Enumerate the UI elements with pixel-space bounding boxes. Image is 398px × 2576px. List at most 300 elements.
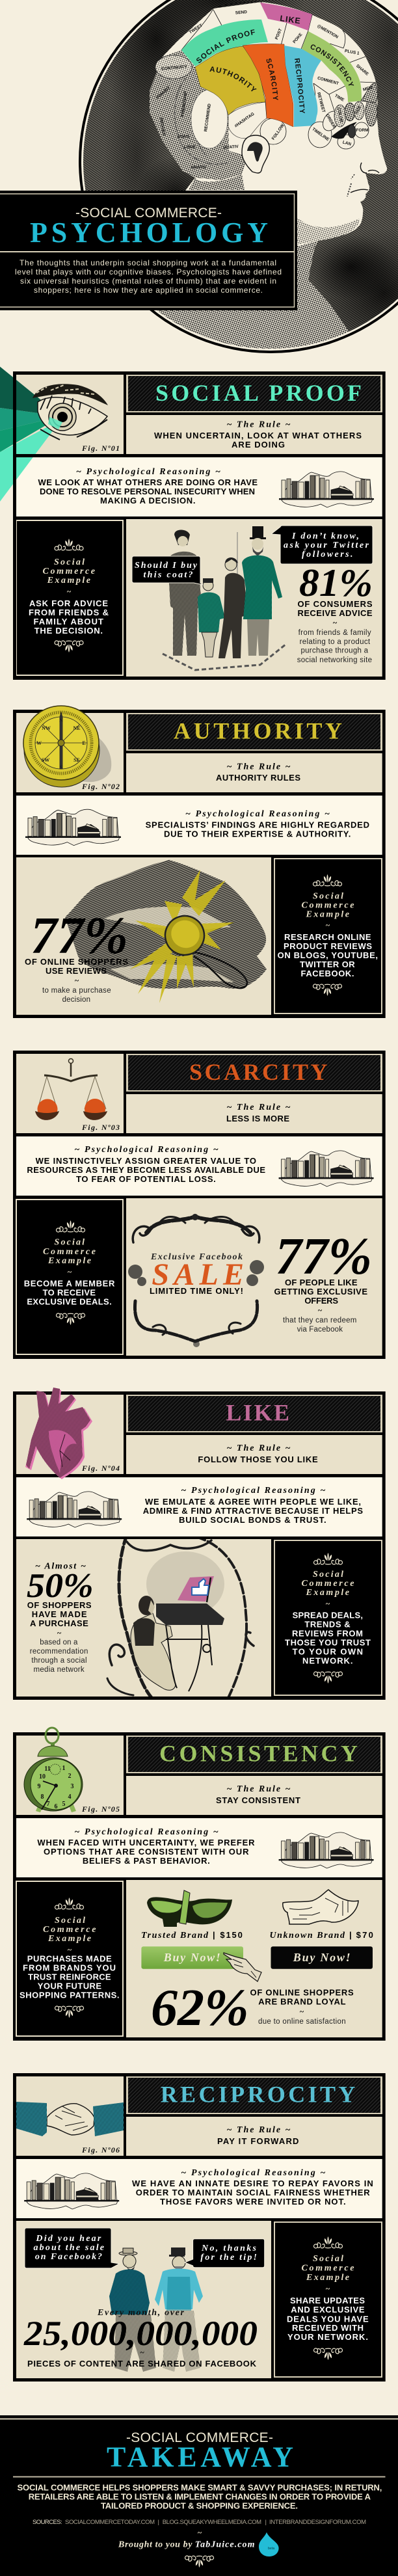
man in blue coat: [109, 2248, 156, 2372]
head organ labels: TIME: [334, 94, 345, 103]
sources: INTERBRANDDESIGNFORUM.COM: [269, 2519, 366, 2526]
stat: 50%: ~ Almost ~: [35, 1562, 86, 1572]
example panel: REVIEWS FROM: [292, 1629, 363, 1639]
stat: 62%: OF ONLINE SHOPPERS: [250, 1988, 354, 1998]
stat: 77%: 77%: [31, 907, 128, 965]
icon: alarm clock: 10: [39, 1773, 46, 1780]
intro text: The thoughts that underpin social shopping work at a fundamental: [20, 258, 276, 267]
speech bubble: no thanks: for the tip!: [200, 2253, 257, 2262]
icon: tabjuice drop logo: beta: [268, 2547, 274, 2551]
psychological reasoning: [37, 1827, 255, 1866]
psychological reasoning: [38, 467, 258, 505]
brought to you by: TabJuice.com: [195, 2540, 255, 2550]
head organ labels: LAN: [342, 140, 352, 147]
stat: 77%: USE REVIEWS: [46, 966, 107, 976]
rule: ~ The Rule ~: [226, 1103, 291, 1112]
illustration: ornate sale frame: [128, 1214, 264, 1347]
sources: SOCIALCOMMERCETODAY.COM: [65, 2519, 155, 2526]
stat: 81%: relating to a product: [300, 638, 371, 646]
example panel: TO RECEIVE: [43, 1288, 96, 1298]
stat: 81%: RECEIVE ADVICE: [298, 608, 373, 618]
example panel: Social: [55, 1237, 85, 1248]
rule: [216, 1784, 300, 1805]
head organ labels: FORM: [356, 128, 369, 133]
frame: [13, 371, 386, 680]
psychological reasoning: DONE TO RESOLVE PERSONAL INSECURITY WHEN: [40, 487, 255, 496]
stat: 77%: ~: [318, 1306, 323, 1315]
colored label: authority: [195, 46, 265, 115]
stat: 25 billion pieces: ~: [140, 2348, 144, 2357]
icon: alarm clock: 5: [62, 1801, 65, 1808]
example panel: FACEBOOK.: [300, 969, 354, 978]
stat: 50%: based on a: [40, 1639, 78, 1646]
example panel: ~: [68, 1945, 72, 1954]
icon: alarm clock: 3: [70, 1783, 74, 1790]
section 4: like: [13, 1388, 386, 1700]
head organ labels: @MENTION: [316, 24, 339, 40]
icon: anatomical heart: [25, 1388, 92, 1479]
hero illustration: phrenology head: [79, 0, 398, 353]
stat: 81%: from friends & family: [298, 629, 371, 637]
speech bubble: no thanks: [185, 2239, 265, 2268]
psychological reasoning: RESOURCES AS THEY BECOME LESS AVAILABLE DUE: [27, 1165, 265, 1175]
psychological reasoning: OPTIONS THAT ARE CONSISTENT WITH OUR: [44, 1847, 249, 1857]
takeaway text: [17, 2482, 382, 2510]
speech bubble: should I buy: this coat?: [143, 570, 192, 580]
psychological reasoning: WE LOOK AT WHAT OTHERS ARE DOING OR HAVE: [38, 477, 258, 487]
psychological reasoning: BELIEFS & PAST BEHAVIOR.: [83, 1856, 210, 1866]
figure caption: Fig. Nº02: [81, 782, 120, 791]
psychological reasoning: THOSE FAVORS WERE INVITED OR NOT.: [160, 2197, 346, 2207]
button: Buy Now!: [293, 1951, 351, 1964]
section title: SCARCITY: [189, 1059, 328, 1085]
rule: LESS IS MORE: [226, 1114, 289, 1123]
psychological reasoning: WE INSTINCTIVELY ASSIGN GREATER VALUE TO: [36, 1156, 256, 1166]
example panel: FAMILY ABOUT: [34, 617, 103, 626]
stat: 81%: ~: [333, 618, 338, 627]
head organ labels: SIZE: [354, 105, 363, 115]
stat: 81%: social networking site: [297, 656, 372, 664]
head organ labels: TWEET: [189, 23, 204, 35]
colored label: scarcity: SCARCITY: [267, 59, 278, 100]
frame: [13, 1051, 386, 1359]
sale text: LIMITED TIME ONLY!: [150, 1286, 243, 1296]
example panel: TRENDS &: [304, 1620, 351, 1630]
icon: pointing hand: [224, 1953, 261, 1981]
icon: white clog: [283, 1890, 358, 1924]
example panel: Commerce: [302, 2264, 354, 2274]
icon: compass: W: [36, 740, 42, 746]
psychological reasoning: SPECIALISTS’ FINDINGS ARE HIGHLY REGARDED: [146, 820, 369, 830]
stat: 25 billion pieces: Every month, over: [97, 2308, 185, 2318]
stat: 25 billion pieces: 25,000,000,000: [23, 2314, 258, 2353]
icon: alarm clock: 6: [55, 1803, 57, 1810]
jaw shading: [297, 218, 359, 245]
icon: alarm clock: 7: [47, 1801, 49, 1808]
head organ labels: PROGEN: [159, 117, 166, 137]
rule: [154, 420, 362, 449]
icon: bookshelf: [25, 809, 121, 846]
stat: 77%: OF PEOPLE LIKE: [285, 1278, 358, 1287]
psychological reasoning: ~ Psychological Reasoning ~: [181, 1486, 325, 1496]
psychological reasoning: TO FEAR OF POTENTIAL LOSS.: [76, 1174, 216, 1184]
example panel: Commerce: [302, 900, 354, 911]
example panel: SPREAD DEALS,: [293, 1611, 363, 1620]
stat: 50%: [27, 1562, 94, 1674]
example panel: PRODUCT REVIEWS: [284, 941, 372, 951]
stat: 81%: purchase through a: [300, 647, 369, 655]
colored label: reciprocity: RECIPROCITY: [295, 59, 305, 113]
example panel: [278, 874, 378, 996]
colored label: consistency: [302, 31, 362, 102]
speech bubble: ask your followers: followers.: [302, 550, 352, 559]
head organ labels: SONS: [178, 135, 190, 139]
psychological reasoning: [146, 809, 369, 839]
psychological reasoning: ~ Psychological Reasoning ~: [185, 809, 330, 819]
takeaway text: TAILORED PRODUCT & SHOPPING EXPERIENCE.: [101, 2501, 298, 2510]
section title: CONSISTENCY: [159, 1741, 358, 1767]
stat: 25 billion pieces: PIECES OF CONTENT ARE SHARED ON FACEBOOK: [27, 2359, 257, 2368]
example panel: Commerce: [302, 1579, 354, 1589]
rule: WHEN UNCERTAIN, LOOK AT WHAT OTHERS: [154, 431, 362, 440]
speech bubble: no thanks: No, thanks: [201, 2244, 257, 2253]
icon: compass: S: [60, 764, 63, 770]
face features: [347, 163, 379, 196]
footer heading: TAKEAWAY: [107, 2441, 293, 2473]
product: trusted brand: $150: [220, 1930, 243, 1940]
section 3: scarcity: [13, 1051, 386, 1359]
rule: ~ The Rule ~: [226, 1784, 291, 1794]
speech bubble: did you hear: on Facebook?: [35, 2252, 102, 2262]
icon: compass: NW: [42, 725, 51, 731]
sources: SOURCES:: [33, 2519, 62, 2526]
example panel: Example: [47, 576, 90, 585]
psychological reasoning: [27, 1145, 265, 1184]
head organ labels: #HASHTAG: [234, 112, 256, 129]
example panel: PURCHASES MADE: [27, 1954, 112, 1964]
head organ labels: ORDER: [325, 113, 336, 129]
example panel: YOUR NETWORK.: [287, 2332, 368, 2342]
rule: AUTHORITY RULES: [216, 773, 300, 783]
icon: bookshelf: [279, 1832, 374, 1868]
stat: 77%: OFFERS: [304, 1296, 338, 1306]
example panel: Social: [313, 2254, 343, 2264]
head organ labels: FOLLOW: [271, 123, 285, 141]
illustration: family of figures: [163, 526, 286, 670]
icon: alarm clock: [24, 1728, 83, 1812]
head organ labels: VITATIV: [223, 144, 239, 150]
icon: balance scales: [35, 1059, 107, 1120]
ear: [242, 135, 269, 173]
rule: ~ The Rule ~: [226, 1443, 291, 1453]
rule: [217, 2125, 298, 2146]
example panel: [285, 1553, 371, 1684]
button: Buy Now!: [163, 1951, 220, 1964]
stat: 25 billion pieces: [23, 2308, 258, 2368]
neck and bust stipple: [157, 241, 349, 349]
intro text: level that plays with our cognitive biases. Psychologists have defined: [15, 267, 282, 276]
psychological reasoning: [143, 1486, 363, 1525]
psychological reasoning: ~ Psychological Reasoning ~: [76, 467, 220, 477]
head organ labels: COLOR: [336, 107, 343, 123]
stat: 62%: [151, 1979, 354, 2037]
head organ labels: POKE: [292, 32, 304, 44]
man in teal vest: [155, 2247, 203, 2372]
example panel: RESEARCH ONLINE: [284, 932, 371, 942]
example panel: SHARE UPDATES: [290, 2296, 365, 2305]
icon: alarm clock: 1: [62, 1765, 65, 1772]
colored label: social proof: [181, 20, 268, 66]
icon: alarm clock: 9: [38, 1783, 40, 1790]
product: trusted brand: Trusted Brand: [141, 1931, 209, 1940]
stat: 77%: [25, 907, 128, 1004]
typewriter machine with like screen: [156, 1576, 224, 1691]
example panel: Social: [313, 891, 343, 902]
sources: |: [265, 2519, 267, 2526]
speech bubble: ask your followers: ask your Twitter: [284, 541, 369, 550]
example panel: Example: [306, 2273, 349, 2283]
example panel: Commerce: [43, 1247, 96, 1257]
icon: bookshelf: [24, 2173, 119, 2209]
head organ labels: RETWEET: [316, 92, 326, 113]
psychological reasoning: ~ Psychological Reasoning ~: [181, 2168, 325, 2178]
example panel: ASK FOR ADVICE: [29, 598, 108, 608]
psychological reasoning: [132, 2168, 373, 2207]
rule: [216, 762, 300, 783]
example panel: BECOME A MEMBER: [24, 1279, 115, 1289]
example panel: Social: [313, 1570, 343, 1579]
takeaway text: RETAILERS ARE ABLE TO LISTEN & IMPLEMENT CHANGES IN ORDER TO PROVIDE A: [29, 2491, 371, 2501]
icon: compass: [23, 706, 111, 787]
icon: alarm clock: 11: [44, 1765, 51, 1773]
example panel: AND EXCLUSIVE: [291, 2305, 365, 2314]
stat: 81%: [297, 561, 373, 664]
icon: compass: NE: [73, 725, 81, 731]
title eyebrow: -SOCIAL COMMERCE-: [75, 206, 222, 221]
speech bubble: ask your followers: [271, 526, 373, 564]
frame: [13, 1732, 386, 2041]
section 6: reciprocity: [13, 2073, 386, 2381]
stat: 77%: decision: [62, 996, 90, 1004]
speech bubble: did you hear: Did you hear: [35, 2234, 101, 2244]
example panel: ~: [68, 1267, 72, 1276]
product: unknown brand: |: [349, 1930, 352, 1940]
section 2: authority: [13, 706, 386, 1018]
example panel: ~: [67, 587, 72, 596]
psychological reasoning: WE EMULATE & AGREE WITH PEOPLE WE LIKE,: [145, 1497, 361, 1507]
colored label: authority: AUTHORITY: [209, 66, 257, 92]
icon: alarm clock: 4: [68, 1793, 72, 1801]
icon: bookshelf: [279, 1151, 374, 1187]
illustration: typist in ornate frame: [107, 1535, 254, 1699]
head organ labels: SHARE: [355, 64, 369, 77]
example panel: FROM FRIENDS &: [29, 608, 109, 617]
head organ labels: LOVE: [184, 145, 196, 150]
colored label: scarcity: [242, 44, 294, 127]
product: trusted brand: [141, 1890, 243, 1969]
brought to you by: Brought to you by: [118, 2540, 192, 2550]
psychological reasoning: WHEN FACED WITH UNCERTAINTY, WE PREFER: [37, 1838, 255, 1847]
section title: AUTHORITY: [174, 718, 342, 744]
product: unknown brand: [269, 1890, 373, 1969]
head organ labels: SEND: [235, 10, 247, 16]
example panel: TO YOUR OWN: [293, 1647, 363, 1657]
icon: green clog: [147, 1890, 232, 1927]
icon: eye: [33, 384, 108, 440]
icon: bookshelf: [27, 1492, 122, 1527]
rule: STAY CONSISTENT: [216, 1795, 300, 1805]
figure caption: Fig. Nº01: [81, 444, 120, 453]
tall man in bowler: [168, 530, 202, 656]
speech bubble: ask your followers: I don’t know,: [291, 531, 359, 541]
eye region organs: [308, 83, 378, 149]
stat: 50%: HAVE MADE: [32, 1609, 87, 1619]
example panel: ~: [326, 2284, 330, 2293]
example panel: THOSE YOU TRUST: [285, 1638, 371, 1648]
product: trusted brand: |: [213, 1930, 215, 1940]
head organ labels: CONTINUITY: [161, 64, 188, 72]
top label band lines: [181, 2, 376, 144]
example panel: NETWORK.: [302, 1656, 352, 1666]
title heading: PSYCHOLOGY: [30, 217, 268, 248]
rule: ~ The Rule ~: [226, 420, 291, 429]
button: [141, 1946, 243, 1969]
head organ labels: TIMELINE: [311, 127, 330, 142]
example panel: Commerce: [43, 567, 95, 576]
example panel: DEALS YOU HAVE: [287, 2314, 369, 2324]
stat: 62%: 62%: [151, 1979, 248, 2037]
example panel: Commerce: [43, 1925, 96, 1935]
rule: PAY IT FORWARD: [217, 2136, 298, 2146]
head organ labels: [155, 10, 373, 170]
icon: alarm clock: 8: [40, 1793, 44, 1801]
example panel: ~: [326, 1599, 330, 1608]
example panel: [20, 1898, 120, 2018]
sources: BLOG.SQUEAKYWHEELMEDIA.COM: [163, 2519, 261, 2526]
section title: LIKE: [226, 1399, 289, 1425]
example panel: TRUST REINFORCE: [28, 1972, 111, 1982]
head organ labels: FRIENDSHIP: [180, 90, 189, 117]
example panel: EXCLUSIVE DEALS.: [27, 1297, 112, 1307]
rule: [198, 1443, 318, 1464]
takeaway footer: ~: [198, 2528, 202, 2537]
head organ labels: INHABIT: [155, 86, 171, 100]
intro text: shoppers; here is how they are applied in social commerce.: [34, 286, 263, 295]
sources: [33, 2519, 366, 2526]
round engraved backdrop: [79, 0, 398, 358]
head organ labels: COMMENT: [317, 76, 339, 86]
frame: [13, 2073, 386, 2381]
example panel: [287, 2236, 369, 2360]
colored label: like: LIKE: [280, 14, 302, 25]
intro text: [15, 258, 282, 295]
example panel: ON BLOGS, YOUTUBE,: [278, 950, 378, 960]
section title: SOCIAL PROOF: [155, 380, 362, 406]
colored label: social proof: SOCIAL PROOF: [196, 29, 255, 63]
takeaway text: SOCIAL COMMERCE HELPS SHOPPERS MAKE SMART & SAVVY PURCHASES; IN RETURN,: [17, 2482, 382, 2492]
rule: ~ The Rule ~: [226, 2125, 291, 2135]
psychological reasoning: ~ Psychological Reasoning ~: [74, 1827, 219, 1837]
head organ labels: MEM: [362, 85, 373, 92]
psychological reasoning: BUILD SOCIAL BONDS & TRUST.: [179, 1515, 326, 1525]
psychological reasoning: MAKING A DECISION.: [100, 496, 195, 505]
stat: 62%: ~: [300, 2007, 304, 2016]
colored label: like: [260, 3, 312, 31]
icon: compass: SE: [73, 757, 80, 763]
psychological reasoning: WE HAVE AN INNATE DESIRE TO REPAY FAVORS IN: [132, 2179, 373, 2188]
example panel: Example: [306, 909, 349, 920]
product: unknown brand: Unknown Brand: [269, 1931, 345, 1940]
stat: 50%: through a social: [31, 1657, 87, 1665]
intro text: six universal heuristics (mental rules of thumb) that are evident in: [20, 276, 276, 286]
sources: |: [157, 2519, 159, 2526]
stat: 77%: GETTING EXCLUSIVE: [274, 1287, 367, 1296]
stat: 77%: that they can redeem: [283, 1317, 356, 1324]
psychological reasoning: ADMIRE & FIND ATTRACTIVE BECAUSE IT HELPS: [143, 1506, 363, 1516]
takeaway footer: [0, 2415, 398, 2576]
example panel: [29, 539, 109, 652]
man in top hat and teal coat: [242, 526, 282, 656]
footer flourish: [185, 2556, 213, 2568]
section title: RECIPROCITY: [161, 2082, 355, 2108]
stat: 77%: to make a purchase: [42, 987, 111, 995]
icon: bookshelf: [279, 472, 374, 507]
stat: 50%: OF SHOPPERS: [27, 1600, 92, 1610]
frame: [13, 1391, 386, 1700]
typist man: [131, 1596, 176, 1690]
light rays from eye: [0, 367, 126, 680]
frame: [13, 710, 386, 1018]
figure caption: Fig. Nº05: [81, 1805, 120, 1814]
psychological reasoning: ~ Psychological Reasoning ~: [74, 1145, 219, 1155]
stat: 77%: via Facebook: [297, 1326, 343, 1334]
section 5: consistency: [13, 1728, 386, 2041]
sale text: Exclusive Facebook: [150, 1252, 243, 1262]
psychological reasoning: ORDER TO MAINTAIN SOCIAL FAIRNESS WHETHER: [136, 2188, 370, 2197]
boy in teal coat: [198, 578, 225, 657]
example panel: ~: [326, 920, 330, 930]
icon: compass: E: [82, 740, 86, 746]
example panel: Example: [306, 1588, 349, 1598]
stat: 62%: due to online satisfaction: [258, 2018, 346, 2026]
head organ labels: RECOMMEND: [204, 103, 212, 132]
stat: 50%: A PURCHASE: [30, 1618, 88, 1628]
speech bubble: should I buy: Should I buy: [135, 561, 198, 570]
stat: 50%: ~: [57, 1628, 62, 1637]
example panel: Example: [47, 1934, 91, 1944]
speech bubble: did you hear: [25, 2228, 120, 2268]
illustration: magnifying glass over rocks: [65, 860, 267, 1003]
head organ labels: POST: [274, 28, 283, 40]
example panel: SHOPPING PATTERNS.: [20, 1991, 120, 2000]
figure caption: Fig. Nº04: [81, 1464, 120, 1473]
figure caption: Fig. Nº03: [81, 1123, 120, 1132]
stat: 50%: recommendation: [30, 1648, 88, 1656]
icon: compass: N: [59, 718, 63, 723]
rule: FOLLOW THOSE YOU LIKE: [198, 1455, 318, 1464]
footer eyebrow: -SOCIAL COMMERCE-: [126, 2430, 273, 2445]
rule: ARE DOING: [232, 440, 285, 449]
brought to you by: [118, 2540, 255, 2550]
stat: 77%: 77%: [276, 1228, 372, 1285]
colored label: reciprocity: [284, 46, 321, 127]
example panel: [24, 1220, 115, 1325]
icon: handshake: [16, 2102, 124, 2136]
psychological reasoning: DUE TO THEIR EXPERTISE & AUTHORITY.: [164, 829, 351, 839]
sale text: SALE: [152, 1257, 244, 1292]
head organ labels: PLUS 1: [344, 49, 360, 56]
head organ labels: AMATIV: [191, 165, 207, 170]
